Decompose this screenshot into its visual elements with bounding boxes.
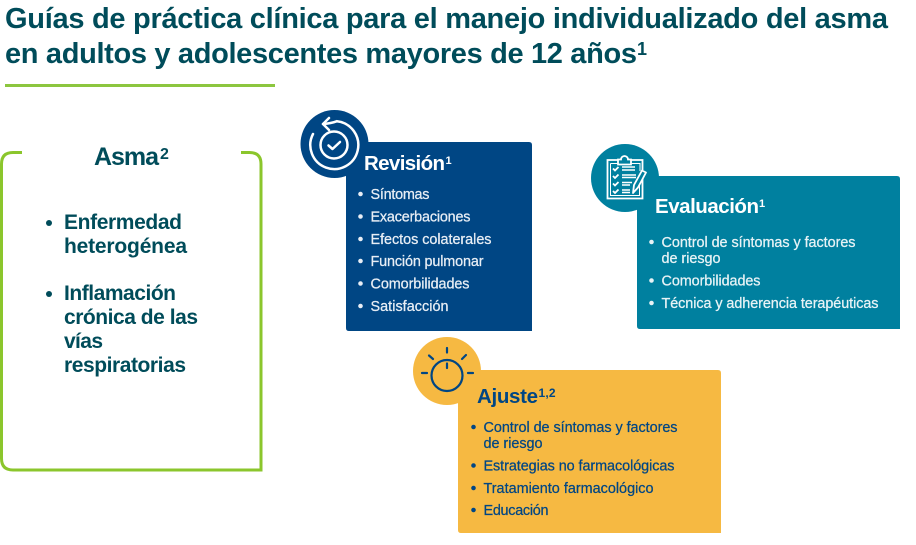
ajuste card xyxy=(458,370,721,533)
ajuste list: de riesgo xyxy=(484,436,542,452)
ajuste list: Control de síntomas y factores xyxy=(484,420,678,436)
asma list: respiratorias xyxy=(64,354,186,377)
panel: evaluación xyxy=(591,144,900,329)
revisión list: Función pulmonar xyxy=(370,254,484,270)
revisión list: Exacerbaciones xyxy=(370,210,470,226)
revisión list: Efectos colaterales xyxy=(370,232,492,248)
evaluación card xyxy=(637,176,900,329)
evaluación heading: 1 xyxy=(759,198,765,210)
title: en adultos y adolescentes mayores de 12 años xyxy=(5,38,637,70)
panel: ajuste xyxy=(413,337,721,533)
ajuste list: Estrategias no farmacológicas xyxy=(484,458,674,474)
evaluación heading: Evaluación xyxy=(655,195,759,218)
icon: dial with rays xyxy=(413,337,481,405)
title: 1 xyxy=(637,39,647,59)
revisión list: Comorbilidades xyxy=(370,276,470,292)
asma frame xyxy=(2,152,261,470)
revisión heading: 1 xyxy=(446,155,452,167)
ajuste heading: Ajuste xyxy=(477,385,538,408)
ajuste list: Educación xyxy=(484,503,548,519)
evaluación list: Técnica y adherencia terapéuticas xyxy=(662,296,878,312)
icon: revisión cycle with check xyxy=(300,110,368,178)
asma heading: 2 xyxy=(160,146,169,163)
revisión card xyxy=(346,142,532,331)
evaluación list: Control de síntomas y factores xyxy=(662,235,856,251)
revisión heading: Revisión xyxy=(364,152,445,175)
evaluación list: Comorbilidades xyxy=(662,274,760,290)
asma list: Inflamación xyxy=(64,282,176,305)
panel: asma xyxy=(2,143,261,470)
revisión list: Satisfacción xyxy=(370,299,448,315)
asma list: Enfermedad xyxy=(64,211,182,234)
ajuste list: Tratamiento farmacológico xyxy=(484,481,654,497)
evaluación list xyxy=(650,235,878,312)
ajuste heading: 1,2 xyxy=(538,386,556,400)
asma list xyxy=(46,211,198,377)
title: Guías de práctica clínica para el manejo individualizado del asma xyxy=(5,3,889,35)
evaluación list: de riesgo xyxy=(662,251,720,267)
title xyxy=(5,3,889,70)
ajuste list xyxy=(472,420,678,519)
icon: clipboard checklist xyxy=(591,144,659,212)
panel: revisión xyxy=(300,110,532,331)
revisión list: Síntomas xyxy=(370,187,430,203)
revisión list xyxy=(359,187,492,315)
asma list: crónica de las xyxy=(64,306,198,329)
asma list: heterogénea xyxy=(64,235,187,258)
asma heading: Asma xyxy=(94,143,160,171)
asma list: vías xyxy=(64,330,103,353)
